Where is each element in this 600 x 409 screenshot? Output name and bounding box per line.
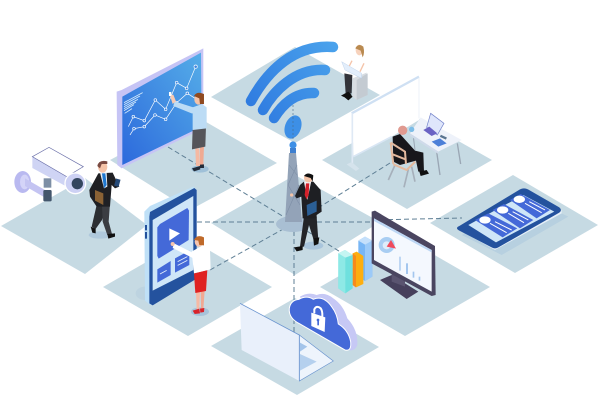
smartphone with list cards (457, 188, 568, 255)
woman at lectern with laptop (341, 45, 368, 100)
network dashed lines (168, 147, 462, 332)
antenna tower (276, 105, 310, 232)
whiteboard panel (347, 77, 419, 171)
desktop monitor with charts (372, 211, 436, 299)
businessman with folder and phone (89, 161, 121, 239)
desk with seated worker (388, 113, 462, 187)
central businessman (290, 173, 323, 251)
security cloud with padlock (289, 294, 357, 350)
wifi symbol (251, 47, 333, 141)
laptop (240, 303, 333, 381)
bar chart columns (338, 237, 372, 293)
security camera (14, 147, 86, 201)
person drawing on board (169, 92, 209, 173)
woman pointing at tablet (171, 236, 211, 316)
video tablet (136, 187, 197, 305)
presentation board with line chart (117, 48, 203, 168)
